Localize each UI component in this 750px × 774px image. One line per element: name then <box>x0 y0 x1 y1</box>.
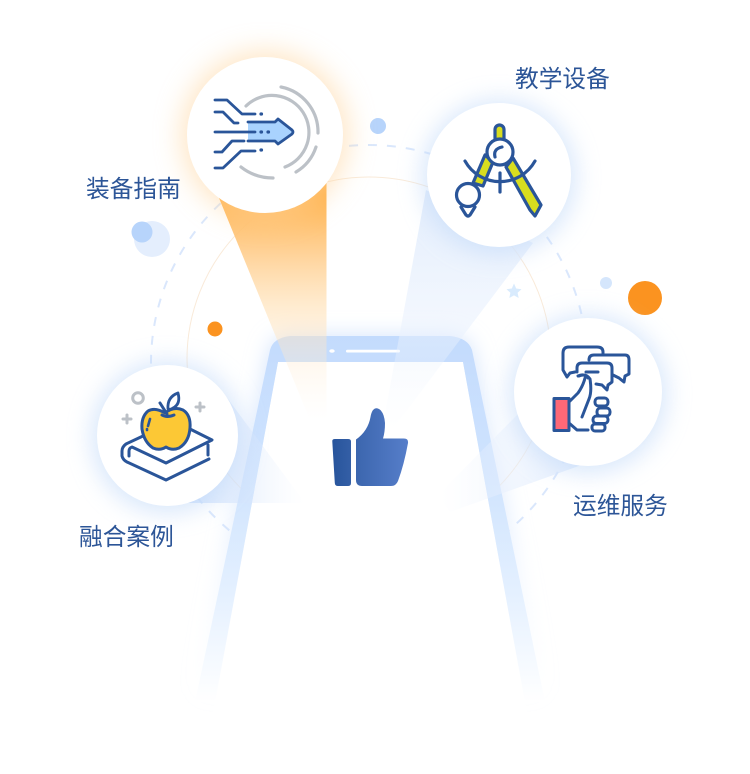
icon: compass <box>456 125 541 216</box>
decorative dots and star <box>132 118 662 336</box>
light beam: left <box>150 395 305 503</box>
phone camera dot <box>329 349 335 353</box>
panel: teaching equipment <box>422 100 576 254</box>
panel: equipment guide <box>182 52 348 218</box>
panel: maintenance service <box>509 315 667 473</box>
phone speaker <box>346 350 400 352</box>
label: teaching equipment: 教学设备 <box>515 66 610 93</box>
phone body <box>195 336 545 774</box>
icon: digital arrow <box>215 87 318 178</box>
icon: hand with speech bubbles <box>554 347 629 431</box>
thin orange orbit ring <box>187 177 551 541</box>
label: equipment guide: 装备指南 <box>86 176 181 203</box>
light beam: top right <box>383 190 533 430</box>
dashed orbit ring <box>151 145 587 581</box>
panel: integrated cases <box>92 361 244 513</box>
light beam: right <box>438 410 590 512</box>
light beam: orange <box>219 180 326 425</box>
label: integrated cases: 融合案例 <box>79 524 174 551</box>
icon: thumbs up <box>332 408 408 486</box>
icon: apple on book <box>122 393 212 480</box>
label: maintenance service: 运维服务 <box>573 493 668 520</box>
